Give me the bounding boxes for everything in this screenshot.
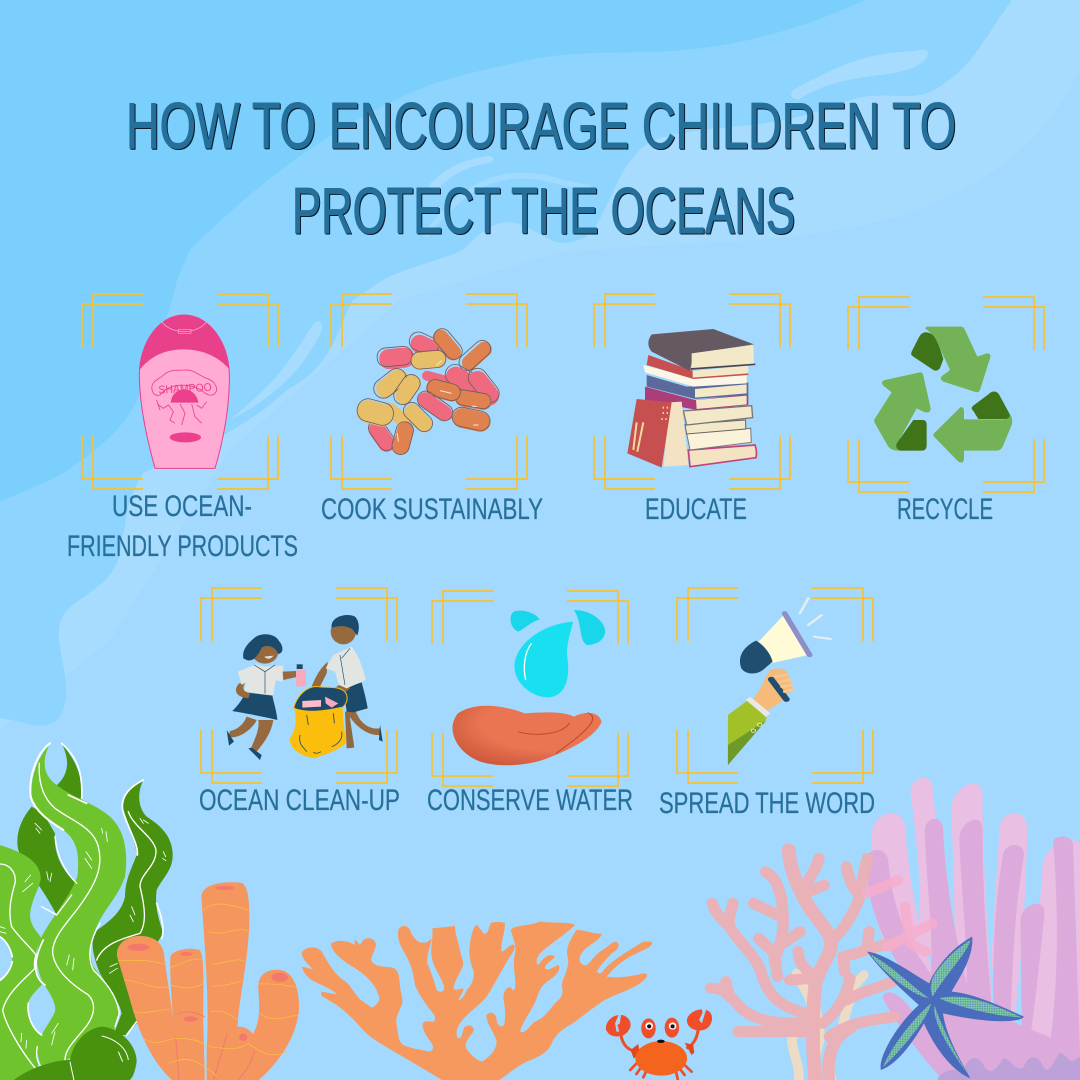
icon: water drops and hand xyxy=(453,610,605,765)
icon: shampoo bottle xyxy=(139,315,229,468)
frame corners xyxy=(432,591,628,786)
label: USE OCEAN- xyxy=(112,490,252,523)
icon: starfish xyxy=(867,937,1024,1078)
panel: use ocean-friendly products xyxy=(67,294,298,563)
icon: recycle arrows xyxy=(874,327,1012,463)
title line 2: PROTECT THE OCEANS xyxy=(292,174,795,247)
frame corners xyxy=(848,297,1044,492)
icon: children collecting rubbish xyxy=(227,615,383,760)
white line work xyxy=(0,743,166,1070)
frame corners xyxy=(594,294,790,489)
label: OCEAN CLEAN-UP xyxy=(199,784,400,817)
dark strands xyxy=(17,743,173,1035)
icon: crab xyxy=(606,1009,712,1079)
panel: educate xyxy=(594,294,790,526)
panel: spread the word xyxy=(659,588,875,820)
label: EDUCATE xyxy=(645,493,747,526)
dark base blobs xyxy=(13,1027,137,1080)
icon: book stack xyxy=(627,329,756,468)
seaweed xyxy=(0,743,173,1080)
label: COOK SUSTAINABLY xyxy=(321,493,543,526)
label: CONSERVE WATER xyxy=(427,784,633,817)
coral: orange tubes xyxy=(117,882,299,1080)
title xyxy=(126,89,956,247)
label xyxy=(67,490,298,563)
panel: conserve water xyxy=(427,591,633,817)
icon: beans xyxy=(354,325,504,457)
frame corners xyxy=(201,588,397,783)
panel: recycle xyxy=(848,297,1044,526)
frame corners xyxy=(331,294,527,489)
anemone: pink xyxy=(867,778,1080,1080)
label: SPREAD THE WORD xyxy=(659,787,875,820)
coral: orange fan xyxy=(302,922,652,1080)
panel: cook sustainably xyxy=(321,294,543,526)
frame corners xyxy=(82,294,278,489)
panel: ocean clean-up xyxy=(199,588,400,817)
label: RECYCLE xyxy=(897,493,993,526)
icon: megaphone in hand xyxy=(728,598,831,765)
coral: pale pink branches xyxy=(710,850,933,1080)
frame corners xyxy=(677,588,873,783)
icon: shampoo bottle: SHAMPOO xyxy=(158,382,212,397)
cream stalks xyxy=(792,973,864,1080)
label: FRIENDLY PRODUCTS xyxy=(67,530,298,563)
light strands xyxy=(0,743,126,1080)
